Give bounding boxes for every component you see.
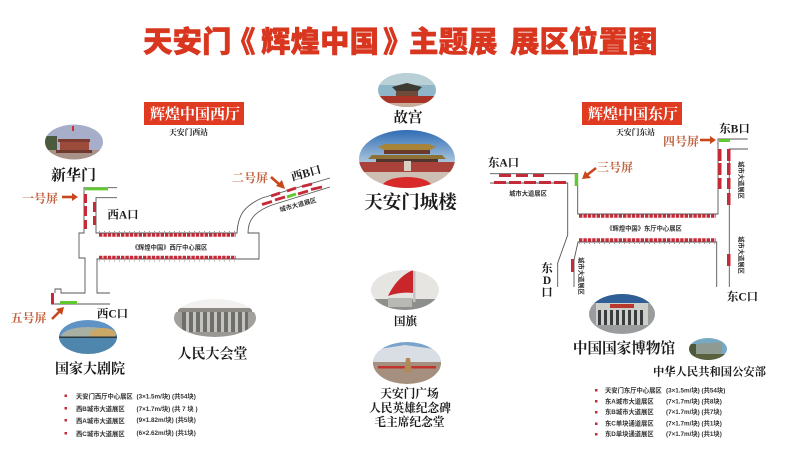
label: east A gate: 东A口 (488, 156, 519, 170)
label: west center zone: 《辉煌中国》西厅中心展区 (132, 242, 208, 252)
screen blocks: west A (84, 194, 96, 229)
heading: east hall (582, 102, 682, 125)
arrow: screen 4 (700, 136, 716, 144)
legend: west: (6×2.62m/块) (共1块) (136, 428, 196, 437)
arrow: screen 5 (52, 307, 64, 319)
legend: west: 西B城市大道展区 (76, 404, 125, 413)
label: National Museum: 中国国家博物馆 (573, 339, 675, 357)
label: east D gate: 口 (541, 286, 553, 299)
label: NCPA: 国家大剧院 (55, 360, 125, 378)
label: square and monuments: 天安门广场 (380, 386, 439, 400)
legend: west: (9×1.82m/块) (共5块) (136, 415, 196, 424)
legend: west (64, 392, 198, 438)
heading: east hall: 辉煌中国东厅 (588, 105, 678, 123)
photo: Great Hall of the People (174, 299, 256, 337)
label: city avenue zone A: 城市大道展区 (509, 188, 548, 198)
screen blocks: west B (262, 184, 322, 204)
legend: east: (7×1.7m/块) (共1块) (666, 418, 722, 428)
screen blocks: east B, C, D (571, 149, 730, 272)
screen 2 green (287, 194, 296, 197)
label: west station: 天安门西站 (169, 127, 208, 137)
screen 4 green (719, 139, 730, 142)
title: 展区位置图 (510, 25, 658, 59)
label: east center zone: 《辉煌中国》东厅中心展区 (606, 224, 682, 232)
legend: east: 东B城市大道展区 (605, 407, 654, 416)
photo: national flag (371, 270, 439, 310)
label: Xinhuamen: 新华门 (51, 166, 96, 184)
label: east D gate: 东 (541, 261, 554, 275)
label: national flag: 国旗 (394, 314, 417, 328)
photo: National Centre for the Performing Arts (59, 320, 117, 354)
label: west B gate: 西B口 (289, 162, 323, 184)
legend: east: 东D单块通道展区 (605, 429, 654, 438)
legend: east: (7×1.7m/块) (共7块) (666, 407, 722, 416)
label: east B gate: 东B口 (719, 122, 750, 136)
screen blocks: west center zone (99, 232, 236, 261)
label: city avenue zone C: 城市大道展区 (737, 236, 746, 275)
photo: Xinhuamen (45, 124, 103, 160)
label: Tiananmen rostrum: 天安门城楼 (364, 192, 458, 214)
label: city avenue zone D: 城市大道展区 (577, 257, 586, 296)
legend: west: 西A城市大道展区 (76, 416, 125, 425)
legend: east: 东C单块通道展区 (605, 418, 654, 428)
panel: west hall map (10, 102, 330, 325)
label: city avenue zone B: 城市大道展区 (737, 161, 746, 200)
label: screen 2: 二号屏 (232, 170, 268, 185)
photo: Tiananmen Square (373, 342, 441, 384)
label: screen 5: 五号屏 (10, 310, 47, 325)
legend: west: 天安门西厅中心展区 (76, 392, 133, 400)
heading: west hall (144, 102, 244, 125)
photo: National Museum (589, 294, 655, 334)
screen 1 green (85, 188, 108, 190)
label: Forbidden City: 故宫 (394, 108, 423, 126)
panel: east hall map (488, 102, 758, 304)
screen 3 green (575, 174, 578, 186)
legend: west: 西C城市大道展区 (76, 429, 125, 438)
label: square and monuments: 人民英雄纪念碑 (369, 401, 451, 415)
screen blocks: east A (494, 174, 566, 184)
photo: Tiananmen rostrum (359, 130, 455, 188)
title: 天安门 (143, 25, 232, 59)
arrow: screen 3 (582, 168, 596, 179)
label: west A gate: 西A口 (107, 208, 139, 222)
label: west C gate: 西C口 (97, 306, 128, 320)
photo: Forbidden City (378, 73, 436, 107)
label: square and monuments: 毛主席纪念堂 (374, 415, 445, 429)
label: east D gate: D (543, 275, 551, 287)
legend: east: (7×1.7m/块) (共8块) (666, 396, 722, 406)
legend: east: 天安门东厅中心展区 (605, 386, 662, 394)
corridor outline (51, 178, 330, 304)
label: east C gate: 东C口 (727, 290, 758, 304)
label: screen 3: 三号屏 (597, 160, 633, 174)
label: screen 4: 四号屏 (663, 134, 699, 148)
label: city avenue zone: 城市大道展区 (278, 195, 318, 214)
legend: east (595, 386, 725, 438)
label: Great Hall: 人民大会堂 (178, 346, 248, 362)
title: 》 (383, 26, 413, 59)
screen 5 (51, 293, 77, 304)
legend: east: 东A城市大道展区 (605, 396, 654, 406)
legend: east: (3×1.5m/块) (共54块) (666, 386, 725, 394)
arrow: screen 2 (271, 177, 285, 189)
heading: west hall: 辉煌中国西厅 (150, 105, 240, 123)
title: 主题展 (409, 26, 498, 59)
label: screen 1: 一号屏 (22, 190, 58, 206)
arrow: screen 1 (62, 193, 78, 201)
label: east station: 天安门东站 (616, 127, 655, 137)
corridor outline (490, 139, 748, 287)
legend: west: (7×1.7m/块) (共 7 块 ) (136, 404, 198, 413)
title: 辉煌中国 (261, 26, 379, 59)
legend: west: (3×1.5m/块) (共54块) (136, 392, 196, 400)
title: 《 (226, 26, 256, 59)
screen blocks: east center zone (579, 216, 716, 244)
photo: Ministry of Public Security (689, 338, 727, 360)
legend: east: (7×1.7m/块) (共1块) (666, 429, 722, 438)
label: Ministry of Public Security: 中华人民共和国公安部 (653, 364, 767, 378)
